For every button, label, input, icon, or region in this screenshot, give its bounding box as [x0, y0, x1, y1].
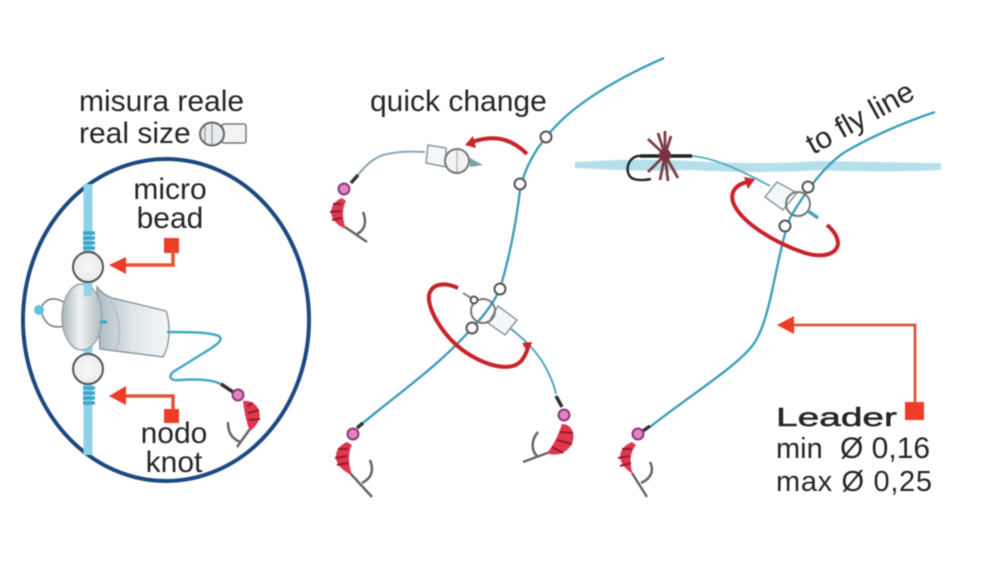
label: knot: knot — [146, 446, 203, 479]
heading: to fly line: to fly line — [800, 75, 920, 161]
icon: nymph — [618, 428, 652, 497]
icon: nymph top — [330, 184, 367, 242]
label: knot — [109, 386, 207, 479]
heading: real size: misura reale — [79, 85, 244, 118]
callout: leader: max Ø 0,25 — [776, 466, 932, 498]
main line — [363, 58, 664, 423]
label: micro bead: micro — [133, 173, 207, 206]
diagram: quick change rig — [330, 58, 664, 497]
callout: leader: min — [776, 433, 823, 465]
callout: leader — [776, 316, 932, 498]
label: micro bead: bead — [137, 202, 203, 235]
icon: lower knot — [83, 388, 95, 403]
icon: lower bead — [73, 354, 103, 384]
heading: real size: real size — [79, 117, 191, 150]
detached dropper — [358, 152, 425, 175]
beads — [466, 132, 552, 334]
vertical line — [84, 184, 92, 455]
icon: connector body — [34, 282, 169, 357]
heading: real size — [79, 85, 244, 150]
rotation ring — [429, 284, 532, 367]
icon: upper bead — [73, 252, 103, 282]
lower right dropper — [510, 328, 556, 394]
rotation ring — [732, 177, 838, 255]
icon: nymph fly — [221, 384, 260, 447]
label: knot: nodo — [141, 417, 207, 450]
icon: connector — [765, 182, 818, 218]
icon: attached connector — [463, 293, 517, 335]
label: micro bead — [109, 173, 207, 274]
arrow: quick change — [465, 136, 527, 154]
dropper to dry fly — [692, 156, 770, 186]
icon: dry fly — [628, 131, 692, 181]
panel: magnified detail — [23, 159, 309, 481]
icon: nymph lower left — [335, 428, 372, 497]
icon: nymph lower right — [523, 410, 574, 462]
callout: leader: Ø 0,16 — [840, 432, 930, 465]
fly line — [650, 112, 935, 427]
water surface — [575, 160, 941, 172]
diagram: dry fly rig — [618, 112, 935, 497]
beads — [780, 182, 814, 232]
snelled tippet line — [167, 332, 221, 384]
icon: upper knot — [83, 233, 95, 253]
heading: quick change: quick change — [370, 85, 547, 118]
circle outline — [23, 159, 309, 481]
icon: real size connector — [200, 122, 246, 146]
callout: leader: Leader — [776, 402, 897, 432]
icon: detached connector — [426, 145, 483, 173]
